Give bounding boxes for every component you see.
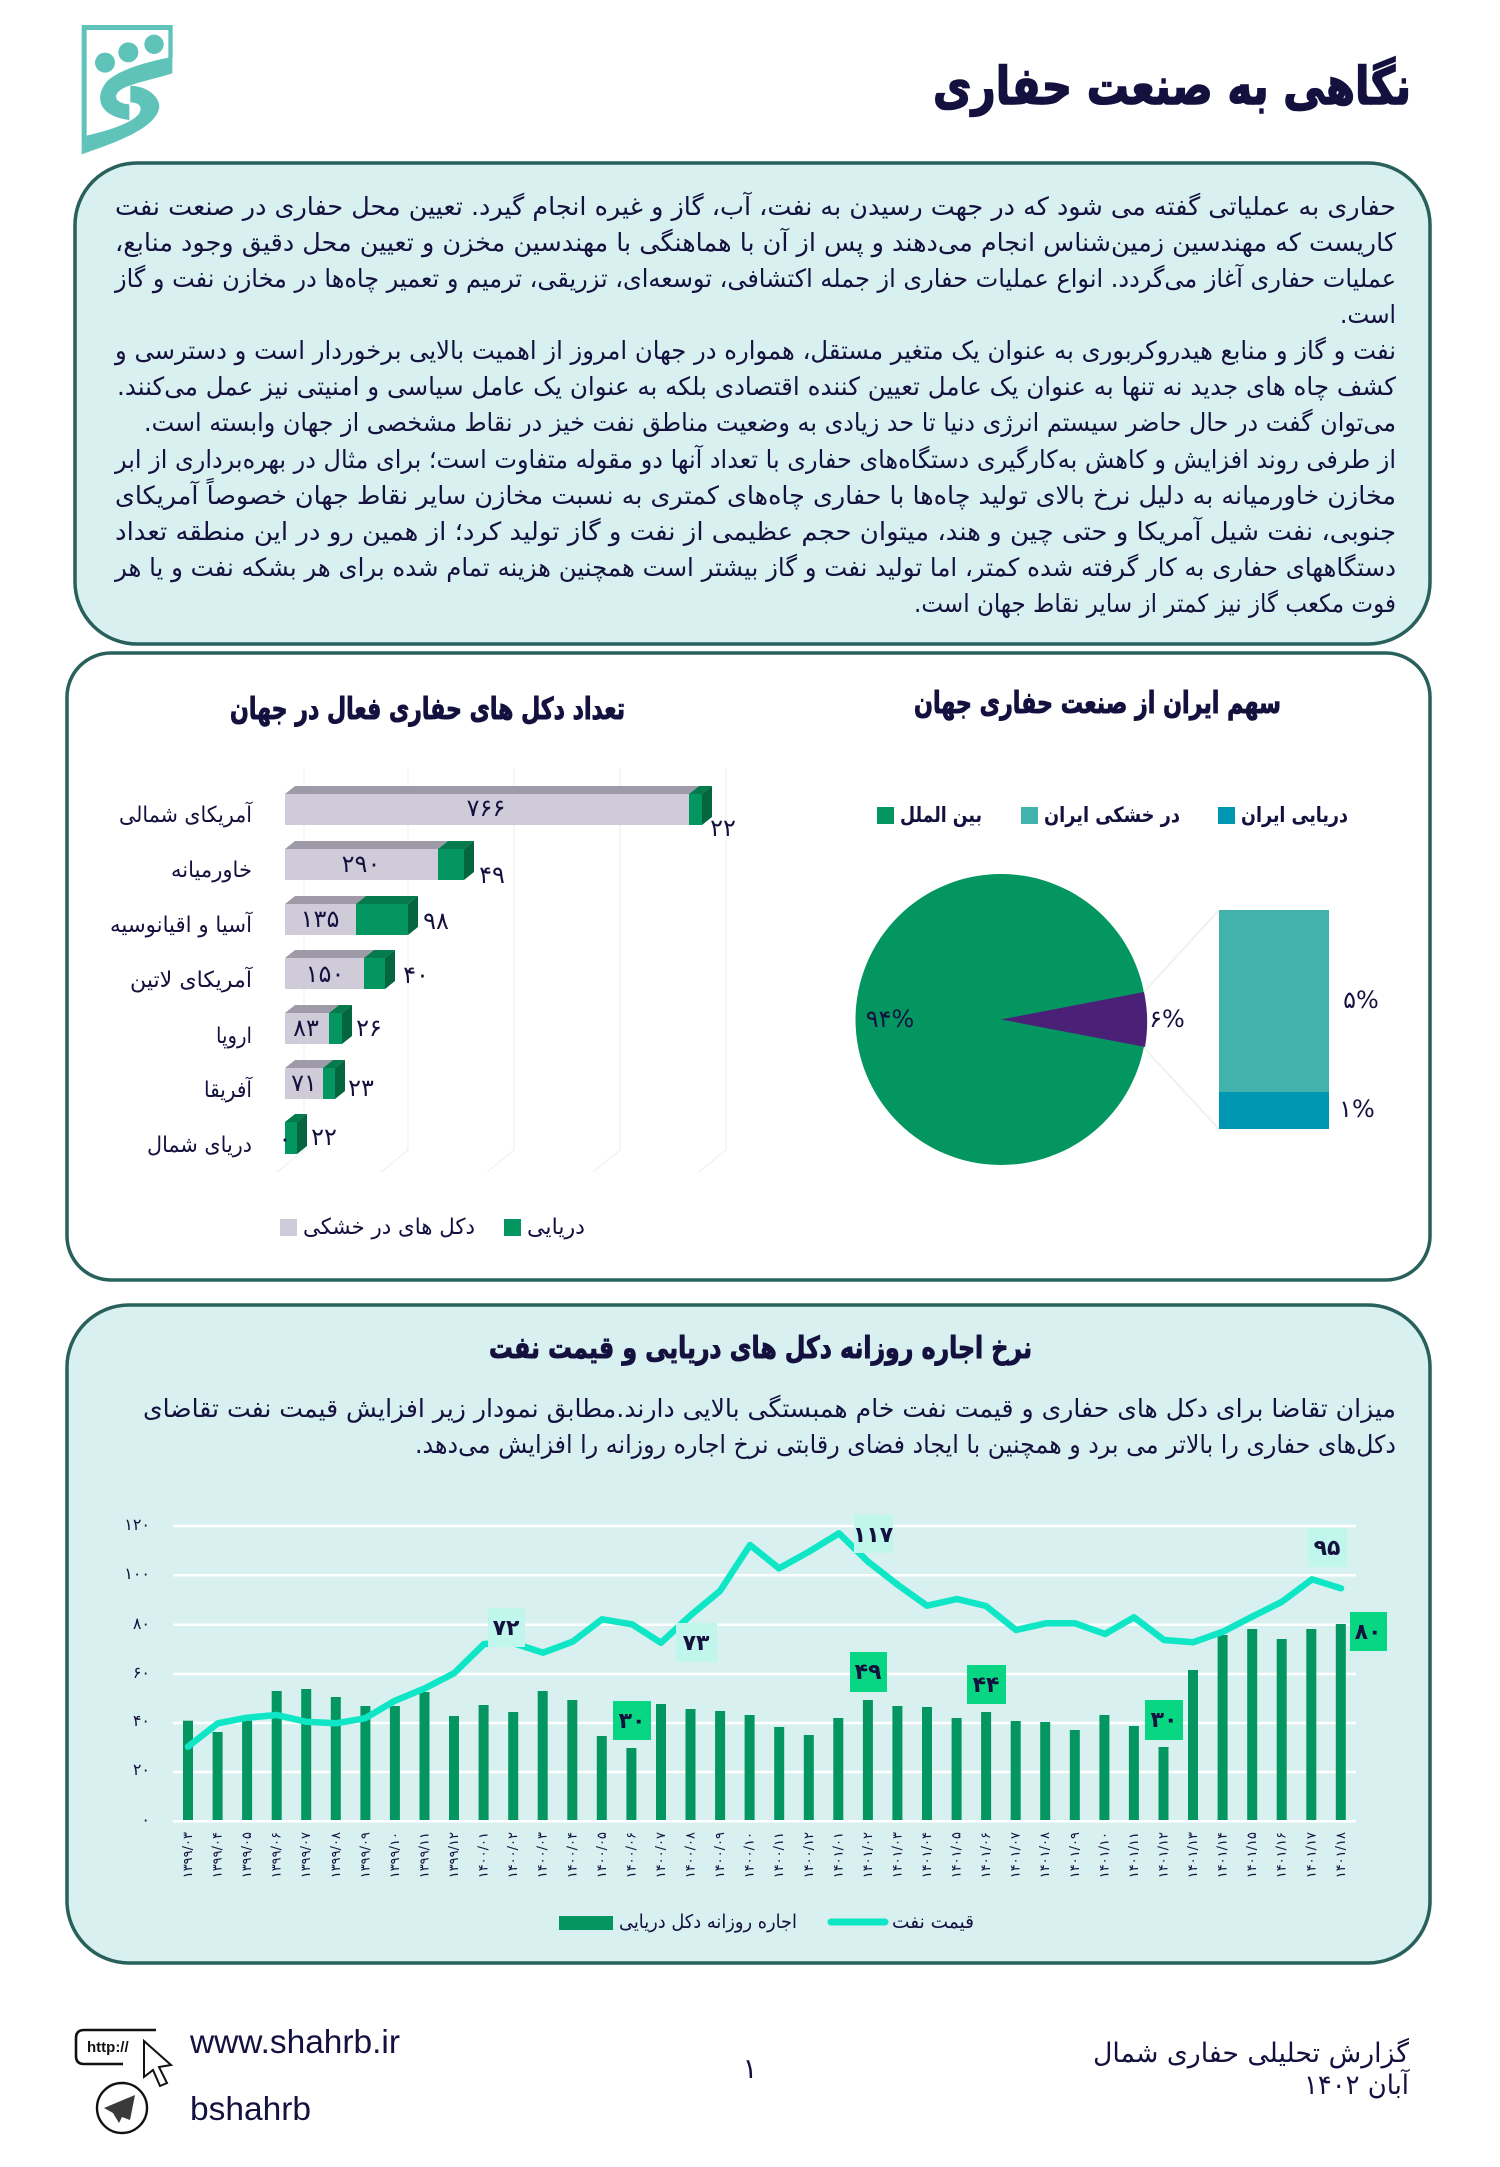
x axis labels: ۱۴۰۱/۱۲ <box>1156 1832 1172 1878</box>
text block: introduction paragraphs: کشف چاه های جدید نه تنها به عنوان یک عامل تعیین کننده اقتصادی بلکه به عنوان یک عامل سیاسی و امنیتی نیز عمل می‌کنند. <box>117 372 1396 402</box>
pie chart: iran share <box>856 803 1379 1165</box>
bar: middle east <box>285 841 474 880</box>
callouts: oil price: ۹۵ <box>1314 1536 1340 1561</box>
legend: combo chart: اجاره روزانه دکل دریایی <box>619 1911 797 1933</box>
heading: rental rate: نرخ اجاره روزانه دکل های دریایی و قیمت نفت <box>489 1331 1032 1366</box>
x axis labels: ۱۴۰۰/۰۲ <box>506 1832 521 1878</box>
legend: share: دریایی ایران <box>1241 803 1348 827</box>
x axis labels: ۱۴۰۱/۱۸ <box>1334 1832 1349 1878</box>
category labels: خاورمیانه <box>171 858 252 883</box>
callouts: rental rate: ۳۰ <box>1151 1708 1177 1733</box>
x axis labels: ۱۳۹۹/۰۳ <box>181 1832 196 1878</box>
text block: introduction paragraphs: مخازن خاورمیانه به دلیل نرخ بالای تولید چاه‌ها با حفاری چاه‌های کمتری به نسبت مخازن سایر نقاط جهان خصوصاً آمریکای <box>115 478 1396 511</box>
value labels: ۴۹ <box>479 861 505 889</box>
logo <box>82 25 173 154</box>
x axis labels: ۱۴۰۰/۰۸ <box>684 1832 698 1878</box>
text block: introduction paragraphs: فوت مکعب گاز نیز کمتر از سایر نقاط جهان است. <box>914 589 1396 619</box>
x axis labels: ۱۴۰۱/۰۷ <box>1009 1832 1024 1878</box>
text block: introduction paragraphs: است. <box>1340 300 1396 329</box>
footer: links <box>76 2023 400 2133</box>
y axis labels: ۲۰ <box>133 1760 150 1779</box>
legend: combo chart <box>559 1911 974 1933</box>
bar: north america <box>285 786 712 825</box>
bar: africa <box>285 1060 345 1099</box>
x axis labels: ۱۴۰۱/۰۴ <box>920 1832 935 1878</box>
callouts: oil price: ۱۱۷ <box>853 1523 894 1548</box>
icon: http cursor <box>76 2030 171 2086</box>
legend: rigs: دریایی <box>527 1215 585 1240</box>
pie chart: iran share: ۵% <box>1343 986 1379 1014</box>
x axis labels: ۱۳۹۹/۰۹ <box>358 1832 373 1878</box>
value labels: ۸۳ <box>293 1014 319 1042</box>
heading: iran share: سهم ایران از صنعت حفاری جهان <box>914 686 1281 721</box>
legend: rigs: دکل های در خشکی <box>303 1215 475 1240</box>
footer: report info: گزارش تحلیلی حفاری شمال <box>1093 2037 1409 2069</box>
pie chart: iran share: ۹۴% <box>866 1005 914 1033</box>
callouts: rental rate: ۴۴ <box>973 1673 999 1698</box>
line: oil price <box>188 1533 1341 1747</box>
x axis labels: ۱۴۰۱/۰۶ <box>979 1832 994 1878</box>
x axis labels: ۱۴۰۰/۱۱ <box>772 1832 787 1878</box>
text block: introduction paragraphs: جنوبی، نفت شیل آمریکا و حتی چین و هند، میتوان حجم عظیمی از نفت و گاز تولید کرد؛ از همین رو در این منطقه تعداد <box>115 516 1396 547</box>
x axis labels: ۱۴۰۱/۰۸ <box>1038 1832 1053 1878</box>
bar chart: active rigs <box>110 768 736 1240</box>
icon: http cursor: http:// <box>87 2039 129 2056</box>
text block: introduction paragraphs: حفاری به عملیاتی گفته می شود که در جهت رسیدن به نفت، آب، گاز و غیره انجام گیرد. تعیین محل حفاری در صنعت نفت <box>115 191 1396 222</box>
x axis labels: ۱۴۰۰/۰۶ <box>624 1832 639 1878</box>
callouts: oil price: ۷۲ <box>493 1616 520 1641</box>
callouts: oil price: ۷۳ <box>683 1631 710 1656</box>
value labels: ۷۱ <box>291 1069 317 1097</box>
bars: daily rental <box>183 1624 1346 1820</box>
legend: share: بین الملل <box>900 803 982 827</box>
bar: europe <box>285 1005 352 1044</box>
text block: rental description <box>143 1394 1396 1460</box>
text block: introduction paragraphs: عملیات حفاری آغاز می‌گردد. انواع عملیات حفاری از جمله اکتشافی، توسعه‌ای، تزریقی، ترمیم و تعمیر چاه‌ها در مخازن نفت و گاز <box>113 263 1396 294</box>
x axis labels: ۱۴۰۰/۰۱ <box>477 1832 492 1878</box>
legend: rigs <box>280 1215 585 1240</box>
x axis labels: ۱۴۰۱/۱۶ <box>1275 1832 1290 1878</box>
text block: introduction paragraphs <box>113 191 1396 619</box>
icon: telegram <box>97 2083 147 2133</box>
value labels: ۱۳۵ <box>301 905 339 933</box>
text block: introduction paragraphs: می‌توان گفت در حال حاضر سیستم انرژی دنیا تا حد زیادی به وضعیت مناطق نفت خیز در نقاط مشخصی از جهان وابسته است. <box>144 408 1396 438</box>
footer: report info: آبان ۱۴۰۲ <box>1304 2069 1410 2101</box>
text block: introduction paragraphs: از طرفی روند افزایش و کاهش به‌کارگیری دستگاه‌های حفاری با تعداد آنها دو مقوله متفاوت است؛ برای مثال در بهره‌برداری از ابر <box>113 444 1396 475</box>
x axis labels: ۱۴۰۱/۱۵ <box>1245 1832 1260 1878</box>
x axis labels: ۱۴۰۰/۰۴ <box>565 1832 580 1878</box>
callouts: rental rate: ۸۰ <box>1355 1620 1381 1645</box>
y axis labels: ۰ <box>141 1810 150 1829</box>
category labels: آمریکای لاتین <box>130 966 253 993</box>
x axis labels: ۱۴۰۱/۰۵ <box>950 1832 965 1878</box>
x axis labels <box>181 1832 1349 1878</box>
value labels <box>279 794 736 1153</box>
value labels: ۹۸ <box>423 907 449 935</box>
value labels: ۴۰ <box>403 961 429 989</box>
pie chart: iran share: ۱% <box>1339 1095 1375 1123</box>
x axis labels: ۱۴۰۱/۰۳ <box>890 1832 905 1878</box>
x axis labels: ۱۴۰۱/۱۷ <box>1304 1832 1319 1878</box>
category labels: اروپا <box>216 1024 252 1049</box>
bar: latin america <box>285 950 395 989</box>
value labels: ۷۶۶ <box>467 794 505 822</box>
x axis labels: ۱۳۹۹/۰۶ <box>270 1832 285 1878</box>
category labels <box>110 801 253 1158</box>
text block: introduction paragraphs: دستگاههای حفاری به کار گرفته شده کمتر، اما تولید نفت و گاز بیشتر است همچنین هزینه تمام شده برای هر بشکه نفت و یا هر <box>113 553 1396 583</box>
page number: ۱ <box>742 2052 758 2085</box>
x axis labels: ۱۴۰۰/۰۳ <box>536 1832 551 1878</box>
x axis labels: ۱۴۰۰/۰۹ <box>713 1832 728 1878</box>
value labels: ۱۵۰ <box>306 960 344 988</box>
y axis labels: ۱۲۰ <box>124 1515 150 1534</box>
category labels: آسیا و اقیانوسیه <box>110 911 253 938</box>
x axis labels: ۱۴۰۰/۱۰ <box>743 1832 758 1878</box>
panel: rental rate and oil price <box>67 1305 1430 1963</box>
x axis labels: ۱۳۹۹/۱۱ <box>418 1832 432 1878</box>
x axis labels: ۱۴۰۱/۱۴ <box>1216 1832 1231 1878</box>
legend: combo chart: قیمت نفت <box>892 1911 974 1933</box>
x axis labels: ۱۳۹۹/۰۷ <box>299 1832 314 1878</box>
x axis labels: ۱۴۰۱/۱۱ <box>1127 1832 1142 1878</box>
value labels: ۲۳ <box>348 1074 374 1102</box>
callouts: rental rate: ۴۹ <box>855 1660 881 1685</box>
x axis labels: ۱۳۹۹/۰۴ <box>211 1832 226 1878</box>
x axis labels: ۱۴۰۱/۰۱ <box>831 1832 846 1878</box>
y axis labels <box>124 1515 150 1829</box>
callouts: rental rate: ۳۰ <box>619 1709 645 1734</box>
text block: rental description: دکل‌های حفاری را بالاتر می برد و همچنین با ایجاد فضای رقابتی نرخ اجاره روزانه را افزایش می‌دهد. <box>415 1430 1396 1460</box>
website: www.shahrb.ir <box>189 2023 400 2060</box>
combo chart: rental rate and oil price <box>124 1515 1387 1933</box>
callouts: rental rate <box>613 1612 1387 1740</box>
legend: share <box>877 803 1348 827</box>
x axis labels: ۱۴۰۱/۰۲ <box>861 1832 876 1878</box>
pie chart: iran share: ۶% <box>1149 1005 1185 1033</box>
value labels: ۲۲ <box>311 1123 337 1151</box>
bar: asia oceania <box>285 896 418 935</box>
x axis labels: ۱۳۹۹/۱۲ <box>447 1832 462 1878</box>
y axis labels: ۱۰۰ <box>124 1564 150 1583</box>
x axis labels: ۱۴۰۱/۰۹ <box>1068 1832 1083 1878</box>
x axis labels: ۱۴۰۱/۱۰ <box>1097 1832 1112 1878</box>
value labels: ۲۹۰ <box>342 850 380 878</box>
y axis labels: ۸۰ <box>133 1614 150 1633</box>
telegram handle: bshahrb <box>190 2090 311 2127</box>
y axis labels: ۴۰ <box>133 1711 150 1730</box>
legend: share: در خشکی ایران <box>1044 803 1180 827</box>
callouts: oil price <box>488 1515 1347 1662</box>
y axis labels: ۶۰ <box>133 1663 150 1682</box>
x axis labels: ۱۴۰۱/۱۳ <box>1186 1832 1201 1878</box>
heading: active rigs: تعداد دکل های حفاری فعال در جهان <box>230 692 625 727</box>
x axis labels: ۱۳۹۹/۰۸ <box>329 1832 344 1878</box>
bar: north sea <box>285 1114 307 1154</box>
x axis labels: ۱۴۰۰/۰۵ <box>595 1832 610 1878</box>
text block: introduction paragraphs: کاریست که مهندسین زمین‌شناس انجام می‌دهند و پس از آن با هماهنگی با مهندسین مخزن و تعیین محل دقیق وجود منابع، <box>115 227 1396 258</box>
value labels: ۲۲ <box>710 814 736 842</box>
x axis labels: ۱۳۹۹/۱۰ <box>388 1832 403 1878</box>
category labels: دریای شمال <box>147 1133 252 1158</box>
x axis labels: ۱۴۰۰/۰۷ <box>654 1832 669 1878</box>
panel: charts <box>67 653 1430 1280</box>
x axis labels: ۱۴۰۰/۱۲ <box>802 1832 817 1878</box>
text block: introduction paragraphs: نفت و گاز و منابع هیدروکربوری به عنوان یک متغیر مستقل، همواره در جهان امروز از اهمیت بالایی برخوردار است و دسترسی و <box>113 336 1396 366</box>
x axis labels: ۱۳۹۹/۰۵ <box>240 1832 255 1878</box>
category labels: آمریکای شمالی <box>119 801 253 828</box>
category labels: آفریقا <box>204 1076 253 1103</box>
footer: report info <box>1093 2037 1410 2101</box>
value labels: ۲۶ <box>356 1014 382 1042</box>
panel: introduction <box>75 163 1430 644</box>
value labels: ۰ <box>279 1125 291 1153</box>
text block: rental description: میزان تقاضا برای دکل های حفاری و قیمت نفت خام همبستگی بالایی دارند.مطابق نمودار زیر افزایش قیمت نفت تقاضای <box>143 1394 1396 1424</box>
